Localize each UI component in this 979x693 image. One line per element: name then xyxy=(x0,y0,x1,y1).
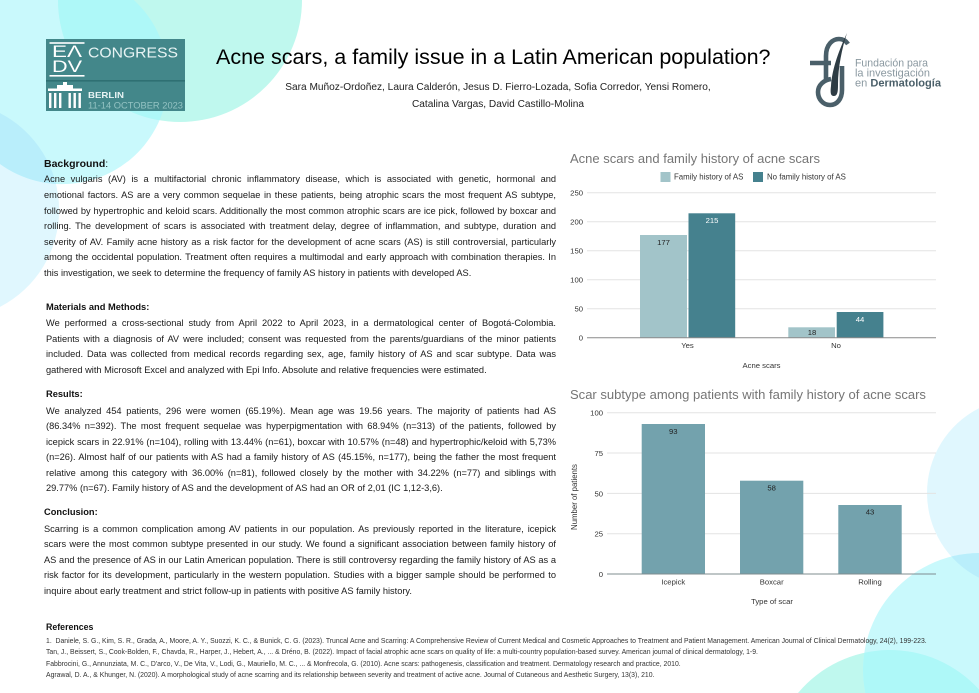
x axis labels: Boxcar xyxy=(760,578,784,586)
authors: Sara Muñoz-Ordoñez, Laura Calderón, Jesus D. Fierro-Lozada, Sofia Corredor, Yensi Romero, xyxy=(285,82,711,93)
value labels xyxy=(657,216,865,337)
text: results body: We analyzed 454 patients, 296 were women (65.19%). Mean age was 19.56 years. The majority of patients had AS xyxy=(46,406,556,416)
text: background body: among the occidental population. Treatment often requires a multimodal and early approach with combination therapies. In xyxy=(44,252,556,262)
heading: materials and methods: Materials and Methods: xyxy=(46,302,149,312)
y axis labels: 250 xyxy=(570,189,583,198)
heading: background: Background: xyxy=(44,158,108,170)
chart: acne scars and family history xyxy=(570,151,936,370)
logo: EADV Congress Berlin: CONGRESS xyxy=(88,44,178,62)
value labels: 58 xyxy=(767,484,776,492)
text: results body: (86.34% n=392). The most frequent sequelae was hyperpigmentation with 68.94% (n=313) of the patients, followed by xyxy=(46,421,556,431)
text: results body: (n=26). Almost half of our patients with AS had a family history of AS (45.15%, n=177), being the father the most frequent xyxy=(46,452,556,462)
reference 1: 1. Daniele, S. G., Kim, S. R., Grada, A., Moore, A. Y., Suozzi, K. C., & Bunick, C. G. (2023). Truncal Acne and Scarring: A Comprehensive Review of Current Medical and Cosmetic Approaches to Treatment and Patient Management. American Journal of Clinical Dermatology, 24(2), 199-223. xyxy=(46,638,927,644)
y axis title: Number of patients xyxy=(570,464,579,530)
y axis labels: 100 xyxy=(590,409,603,418)
text: background body xyxy=(44,174,556,278)
logo: Fundación para la investigación en Dermatología: Fundación para xyxy=(855,58,928,70)
y axis labels: 200 xyxy=(570,218,583,227)
text: background body: followed by hypertrophic and keloid scars. Additionally the most common atrophic scars are ice pick, followed by boxcar and xyxy=(44,206,556,216)
value labels: 93 xyxy=(669,427,678,436)
legend xyxy=(660,172,846,182)
x axis labels xyxy=(681,341,841,370)
value labels xyxy=(669,427,874,516)
x axis labels: Type of scar xyxy=(751,597,793,606)
legend: Family history of AS xyxy=(674,172,743,182)
text: background body: rolling. The development of scars is associated with treatment delay, degree of inflammation, and subtype, duration and xyxy=(44,221,556,231)
text: conclusion body xyxy=(44,524,556,596)
panel: background xyxy=(44,158,556,278)
y axis labels xyxy=(590,409,603,579)
text: results body: icepick scars in 22.91% (n=104), rolling with 13.44% (n=61), boxcar with 10.57% (n=48) and hypertrophic/keloid with 5,73% xyxy=(46,437,556,447)
x axis labels: Yes xyxy=(681,341,694,350)
y axis labels: 100 xyxy=(570,276,583,285)
x axis labels xyxy=(661,578,882,606)
logo: Fundación para la investigación en Dermatología xyxy=(810,33,942,108)
logo: EADV Congress Berlin: BERLIN xyxy=(88,90,124,100)
y axis labels: 50 xyxy=(574,305,583,314)
y axis labels: 0 xyxy=(579,334,583,343)
value labels: 43 xyxy=(866,508,874,516)
heading: conclusion: Conclusion: xyxy=(44,507,98,517)
y axis labels: 75 xyxy=(594,449,603,458)
logo: EADV Congress Berlin xyxy=(46,39,185,111)
bars: no xyxy=(788,312,883,338)
panel: conclusion xyxy=(44,507,556,596)
text: conclusion body: AS and the presence of AS in our Latin American population. There is still controversy regarding the family history of AS as a xyxy=(44,555,556,565)
authors: Catalina Vargas, David Castillo-Molina xyxy=(412,99,584,110)
text: conclusion body: risk factor for its development, particularly in the western population. Studies with a bigger sample should be performed to xyxy=(44,570,556,580)
chart: scar subtype xyxy=(570,387,936,606)
logo: Fundación para la investigación en Dermatología: en Dermatología xyxy=(855,78,941,90)
panel: materials and methods xyxy=(46,302,556,375)
y axis labels: 0 xyxy=(599,570,603,579)
text: results body xyxy=(46,406,556,493)
reference 3: Fabbrocini, G., Annunziata, M. C., D'arco, V., De Vita, V., Lodi, G., Mauriello, M. C., ... & Monfrecola, G. (2010). Acne scars: pathogenesis, classification and treatment. Dermatology research and practice, 2010. xyxy=(46,660,681,668)
logo: EADV Congress Berlin: DV xyxy=(52,57,83,76)
heading: results: Results: xyxy=(46,389,83,399)
y axis labels xyxy=(570,189,583,343)
value labels: 44 xyxy=(856,315,865,324)
reference 2: Tan, J., Beissert, S., Cook-Bolden, F., Chavda, R., Harper, J., Hebert, A., ... & Dréno, B. (2022). Impact of facial atrophic acne scars on quality of life: a multi-country population-based survey. American journal of clinical dermatology, 1-9. xyxy=(46,649,758,656)
value labels: 18 xyxy=(808,328,816,337)
text: materials and methods body: Patients with a diagnosis of AV were included; consent was requested from the parents/guardians of the minor patients xyxy=(46,334,556,344)
text: background body: this investigation, we seek to determine the frequency of family AS history in patients with developed AS. xyxy=(44,268,471,278)
x axis labels: Rolling xyxy=(858,578,882,586)
reference 4: Agrawal, D. A., & Khunger, N. (2020). A morphological study of acne scarring and its relationship between severity and treatment of active acne. Journal of Cutaneous and Aesthetic Surgery, 13(3), 210. xyxy=(46,672,654,679)
bars: yes xyxy=(640,213,735,338)
title: Acne scars, a family issue in a Latin American population? xyxy=(216,45,771,69)
x axis labels: Icepick xyxy=(661,578,685,586)
text: conclusion body: Scarring is a common complication among AV patients in our population. As previously reported in the literature, icepick xyxy=(44,524,556,534)
text: background body: Acne vulgaris (AV) is a multifactorial chronic inflammatory disease, which is associated with genetic, hormonal and xyxy=(44,174,556,184)
text: background body: emotional factors. AS are a very common sequelae in these patients, being atrophic scars the most frequent AS subtype, xyxy=(44,190,556,200)
text: results body: relative among this category with 36.00% (n=81), followed closely by the mother with 34.22% (n=77) and siblings with xyxy=(46,468,556,478)
text: conclusion body: scars were the most common subtype presented in our study. We found a significant association between family history of xyxy=(44,539,556,549)
y axis labels: 25 xyxy=(594,530,603,539)
x axis labels: Acne scars xyxy=(742,361,781,370)
text: background body: severity of AV. Family acne history as a risk factor for the development of acne scars (AS) is still controversial, particularly xyxy=(44,237,556,247)
value labels: 215 xyxy=(706,216,718,225)
chart title: Acne scars and family history of acne scars xyxy=(570,151,820,166)
bars xyxy=(642,424,902,574)
heading: references: References xyxy=(46,622,93,632)
x axis labels: No xyxy=(831,341,841,350)
y axis labels: 150 xyxy=(570,247,583,256)
panel: results xyxy=(46,389,556,493)
logo: EADV Congress Berlin: EΛ xyxy=(52,42,83,61)
text: conclusion body: inquire about early treatment and strict follow-up in patients with positive AS family history. xyxy=(44,586,412,596)
chart title: Scar subtype among patients with family history of acne scars xyxy=(570,387,926,402)
logo: Fundación para la investigación en Dermatología: la investigación xyxy=(855,68,930,80)
text: materials and methods body: included. Data was collected from medical records regarding sex, age, family history of AS and scar subtype. Data was xyxy=(46,349,556,359)
y axis labels: 50 xyxy=(594,489,603,498)
authors xyxy=(285,82,711,110)
text: materials and methods body xyxy=(46,318,556,375)
text: materials and methods body: We performed a cross-sectional study from April 2022 to April 2023, in a dermatological center of Bogotá-Colombia. xyxy=(46,318,556,328)
panel: references xyxy=(46,622,927,679)
text: materials and methods body: gathered with Microsoft Excel and analyzed with Epi Info. Absolute and relative frequencies were estimated. xyxy=(46,365,487,375)
legend: No family history of AS xyxy=(767,172,846,182)
text: results body: 29.77% (n=67). Family history of AS and the development of AS had an OR of 2,01 (IC 1,12-3,6). xyxy=(46,483,443,493)
value labels: 177 xyxy=(657,238,670,247)
